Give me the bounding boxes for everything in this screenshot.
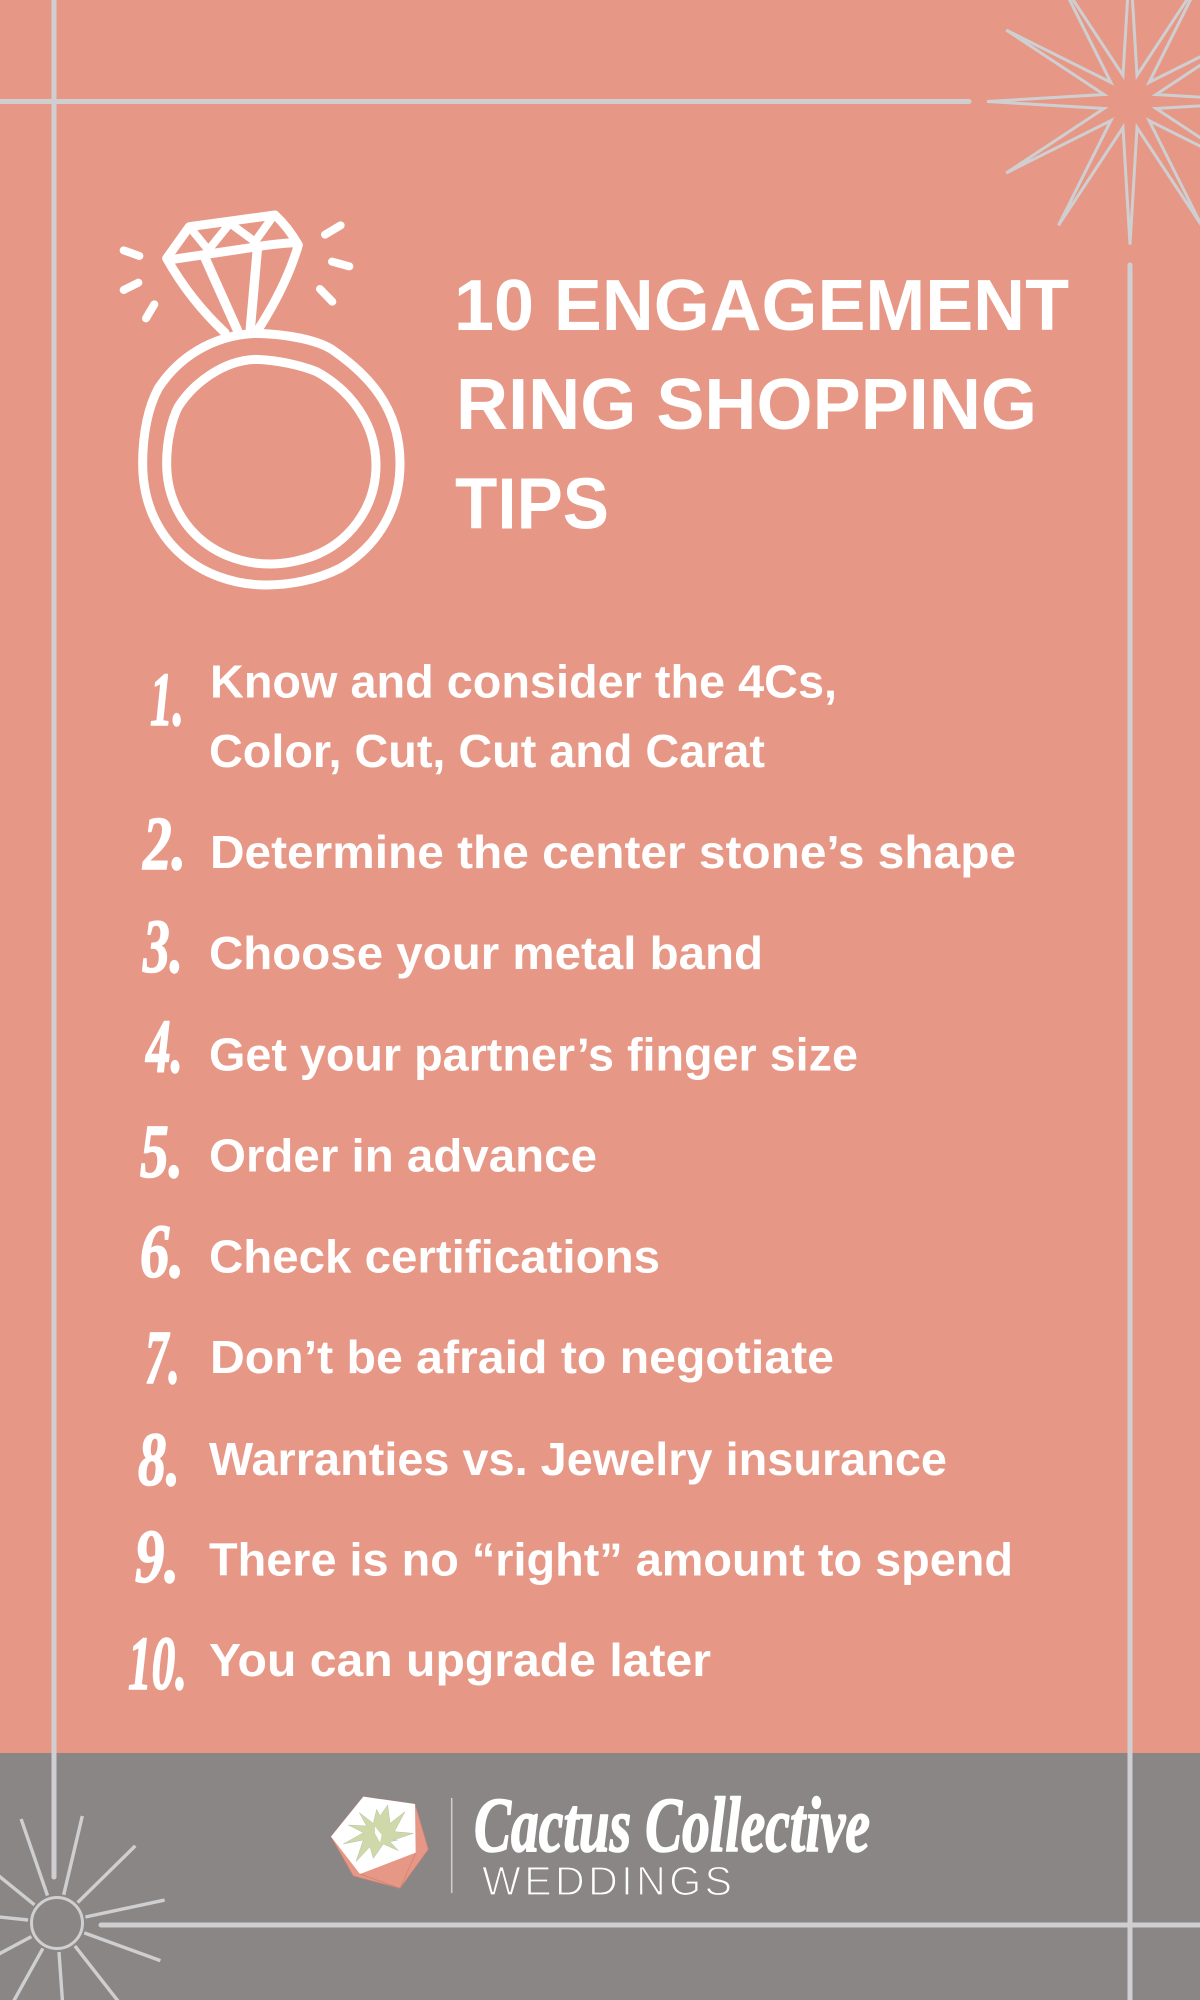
tip 7: Don’t be afraid to negotiate [210,1331,834,1383]
tip 4: Get your partner’s finger size [209,1028,858,1080]
tip 3: Choose your metal band [209,927,763,979]
tip 9: There is no “right” amount to spend [209,1534,1013,1586]
tip 2 [142,802,1016,886]
wordmark: Cactus Collective: Cactus Collective [474,1781,870,1868]
tip 4: 4. [145,1005,183,1089]
tip 10: 10. [128,1622,187,1706]
divider [451,1798,453,1893]
tip 6: Check certifications [209,1230,660,1282]
tip 5: 5. [140,1110,183,1194]
logo: Cactus Collective Weddings [331,1781,870,1904]
tip 1: 1. [150,658,184,742]
tip 3 [142,905,763,989]
tip 2: Determine the center stone’s shape [210,826,1016,878]
tip 10: You can upgrade later [209,1634,711,1686]
tip 1 [150,656,837,777]
tip 7: 7. [145,1316,180,1400]
tip 9 [135,1515,1013,1599]
icon: faceted gem with cactus [331,1797,428,1888]
title: 10 ENGAGEMENT [454,266,1069,346]
title: RING SHOPPING [456,365,1037,445]
icon: top-right starburst [987,0,1200,244]
title [454,266,1069,544]
icon: diamond engagement ring [124,215,400,585]
title: TIPS [455,464,609,544]
tip 7 [145,1316,834,1400]
tip 4 [145,1005,858,1089]
panel: grey footer band [0,1753,1200,2000]
tip 5: Order in advance [209,1130,597,1182]
panel: list of ten tips [128,656,1016,1706]
tip 5 [140,1110,597,1194]
tip 2: 2. [142,802,186,886]
tip 9: 9. [135,1515,179,1599]
tip 8: Warranties vs. Jewelry insurance [209,1433,947,1485]
tip 1: Color, Cut, Cut and Carat [209,725,765,777]
tip 8: 8. [138,1418,180,1502]
tip 6 [140,1210,660,1294]
tip 6: 6. [140,1210,184,1294]
icon: bottom-left sunburst [0,1816,165,2000]
tip 3: 3. [142,905,183,989]
tip 10 [128,1622,711,1706]
tip 1: Know and consider the 4Cs, [210,656,837,708]
wordmark: WEDDINGS: WEDDINGS [482,1858,732,1904]
tip 8 [138,1418,947,1502]
